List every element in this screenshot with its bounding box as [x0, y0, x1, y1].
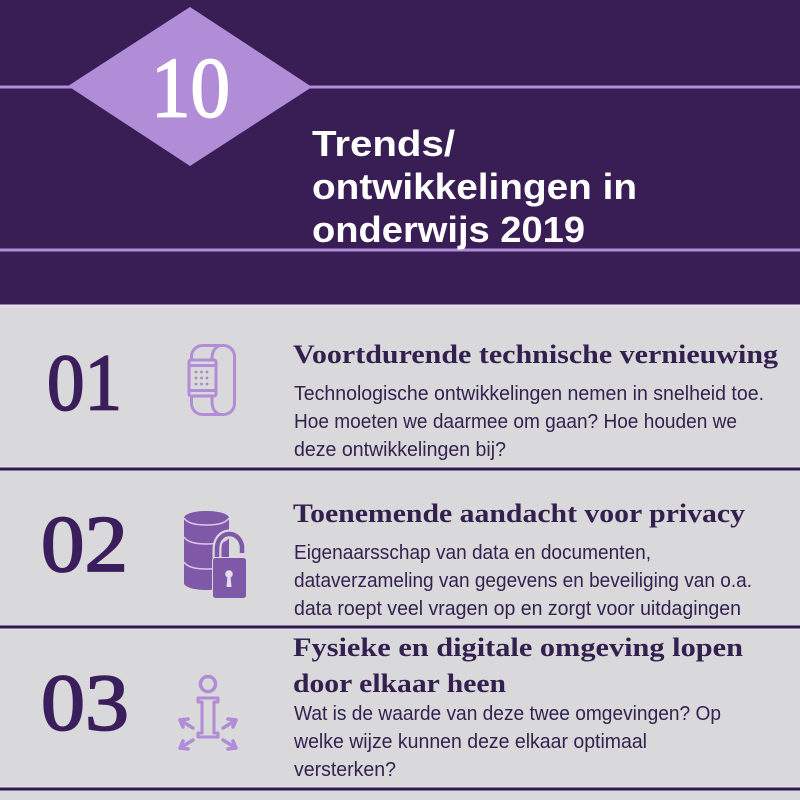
description: Hoe moeten we daarmee om gaan? Hoe houden we: [294, 410, 737, 433]
light top band: [0, 304, 800, 308]
panel: trend 02: [41, 499, 752, 620]
description: Technologische ontwikkelingen nemen in snelheid toe.: [294, 382, 764, 405]
description: welke wijze kunnen deze elkaar optimaal: [293, 730, 647, 753]
number 03: 03: [41, 658, 129, 748]
heading: door elkaar heen: [293, 669, 507, 698]
heading: Toenemende aandacht voor privacy: [293, 499, 745, 528]
heading: [293, 633, 744, 698]
header line bottom: [0, 248, 800, 252]
panel: header background: [0, 0, 800, 305]
description: [293, 702, 721, 781]
divider 2: [0, 626, 800, 630]
icon: database with open padlock: [184, 511, 246, 598]
badge: diamond with number 10: [68, 7, 312, 166]
title: Trends/: [312, 123, 455, 164]
description: [294, 382, 764, 461]
description: versterken?: [294, 758, 396, 781]
description: dataverzameling van gegevens en beveiliging van o.a.: [294, 569, 752, 592]
description: Eigenaarsschap van data en documenten,: [294, 541, 651, 564]
badge: diamond with number 10: 10: [151, 40, 230, 136]
panel: trend 03: [41, 633, 744, 781]
header line top: [0, 86, 800, 88]
description: data roept veel vragen op en zorgt voor uitdagingen: [294, 597, 741, 620]
heading: Voortdurende technische vernieuwing: [293, 340, 778, 369]
icon: smartwatch: [189, 346, 234, 414]
panel: trend 01: [47, 338, 778, 461]
title: ontwikkelingen in: [312, 166, 637, 207]
title: [312, 123, 637, 250]
divider 1: [0, 466, 800, 470]
description: Wat is de waarde van deze twee omgevingen? Op: [294, 702, 721, 725]
title: onderwijs 2019: [312, 209, 585, 250]
panel: list background: [0, 305, 800, 800]
heading: Fysieke en digitale omgeving lopen: [293, 633, 744, 662]
description: [294, 541, 752, 620]
description: deze ontwikkelingen bij?: [294, 438, 506, 461]
number 01: 01: [47, 338, 122, 428]
divider 3: [0, 786, 800, 790]
icon: info person with arrows: [180, 676, 236, 749]
number 02: 02: [41, 499, 128, 589]
